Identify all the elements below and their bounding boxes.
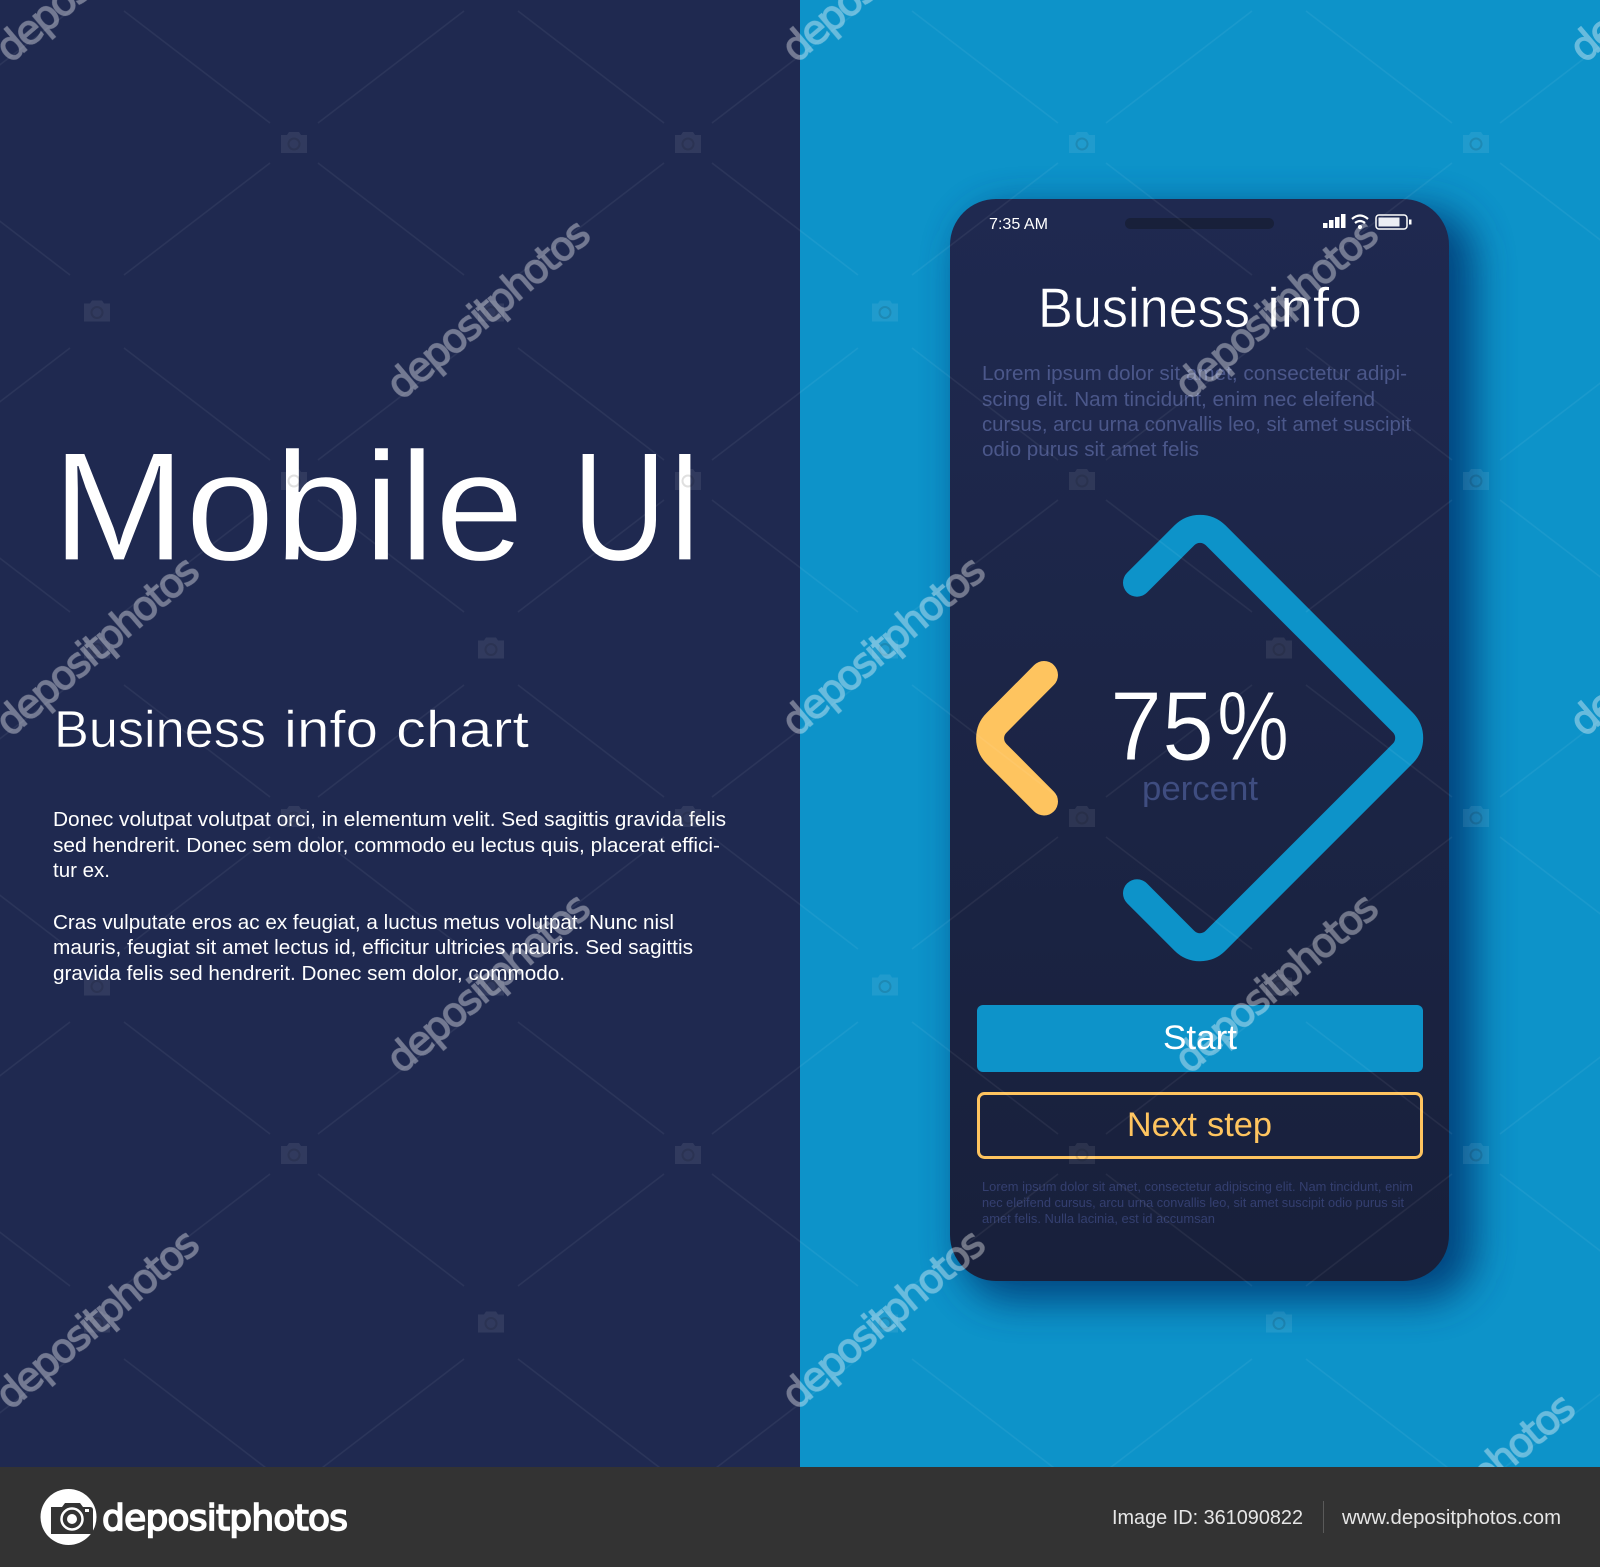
subtitle: info bbox=[284, 701, 378, 759]
phone footnote text: nec eleifend cursus, arcu urna convallis leo, sit amet suscipit odio purus sit bbox=[982, 1195, 1404, 1210]
subtitle: chart bbox=[396, 701, 530, 759]
chart value bbox=[1110, 671, 1289, 781]
chart: yellow progress segment bbox=[990, 675, 1044, 802]
watermarks: depositphotos: depositphotos bbox=[773, 547, 995, 746]
subtitle: Business bbox=[54, 701, 266, 759]
text block: second paragraph: gravida felis sed hendrerit. Donec sem dolor, commodo. bbox=[53, 962, 565, 985]
button: start: Start bbox=[1163, 1019, 1238, 1057]
chart value: % bbox=[1217, 671, 1289, 781]
title: UI bbox=[572, 420, 703, 593]
text block: first paragraph: sed hendrerit. Donec sem dolor, commodo eu lectus quis, placerat effici- bbox=[53, 834, 720, 857]
footer url: www.depositphotos.com bbox=[1341, 1507, 1561, 1529]
title: Mobile bbox=[52, 420, 524, 593]
panel: left navy background bbox=[0, 0, 800, 1467]
phone intro text: Lorem ipsum dolor sit amet, consectetur adipi- bbox=[982, 363, 1407, 385]
icon: footer camera logo bbox=[40, 1489, 96, 1545]
text block: first paragraph: tur ex. bbox=[53, 859, 110, 882]
phone intro text: odio purus sit amet felis bbox=[982, 439, 1199, 461]
subtitle bbox=[54, 701, 530, 759]
button: next step: step bbox=[1207, 1106, 1272, 1144]
text block: second paragraph bbox=[53, 911, 693, 985]
chart: blue progress diamond bbox=[1137, 529, 1409, 947]
text block: second paragraph: Cras vulputate eros ac ex feugiat, a luctus metus volutpat. Nunc nisl bbox=[53, 911, 674, 934]
text block: first paragraph bbox=[53, 808, 726, 882]
footer bar bbox=[0, 1467, 1600, 1567]
chart value label: percent bbox=[1142, 770, 1259, 808]
phone intro text: scing elit. Nam tincidunt, enim nec eleifend bbox=[982, 389, 1375, 411]
panel: right blue background bbox=[800, 0, 1600, 1467]
button: next step: Next bbox=[1127, 1106, 1198, 1144]
phone notch bbox=[1125, 218, 1274, 229]
watermarks: depositphotos: depositphotos bbox=[378, 210, 600, 409]
phone footnote text bbox=[982, 1179, 1413, 1226]
phone heading: Business bbox=[1038, 276, 1250, 339]
phone shadow bbox=[962, 210, 1474, 1300]
icon: battery bbox=[1376, 215, 1412, 229]
button: start bbox=[977, 1005, 1423, 1072]
watermarks: depositphotos: depositphotos bbox=[773, 1220, 995, 1419]
button: next step bbox=[978, 1094, 1422, 1158]
phone intro text bbox=[982, 363, 1411, 461]
footer logo text: depositphotos bbox=[102, 1498, 348, 1539]
watermarks: depositphotos: depositphotos bbox=[378, 884, 600, 1083]
icon: signal bars bbox=[1323, 214, 1346, 228]
status bar time: 7:35 AM bbox=[989, 216, 1048, 233]
phone footnote text: amet felis. Nulla lacinia, est id accumsan bbox=[982, 1211, 1215, 1226]
phone footnote text: Lorem ipsum dolor sit amet, consectetur adipiscing elit. Nam tincidunt, enim bbox=[982, 1179, 1413, 1194]
chart value: 75 bbox=[1110, 671, 1214, 781]
footer image id: Image ID: 361090822 bbox=[1112, 1507, 1303, 1529]
icon: wifi bbox=[1352, 216, 1368, 228]
watermarks: depositphotos: depositphotos bbox=[1166, 210, 1388, 409]
phone body bbox=[950, 199, 1449, 1281]
watermarks: depositphotos: depositphotos bbox=[1166, 884, 1388, 1083]
text block: first paragraph: Donec volutpat volutpat orci, in elementum velit. Sed sagittis gravida felis bbox=[53, 808, 726, 831]
panel: phone mockup bbox=[950, 199, 1449, 1281]
footer divider bbox=[1323, 1501, 1324, 1533]
phone heading: info bbox=[1267, 276, 1362, 339]
phone intro text: cursus, arcu urna convallis leo, sit amet suscipit bbox=[982, 414, 1411, 436]
text block: second paragraph: mauris, feugiat sit amet lectus id, efficitur ultricies mauris. Sed sagittis bbox=[53, 936, 693, 959]
